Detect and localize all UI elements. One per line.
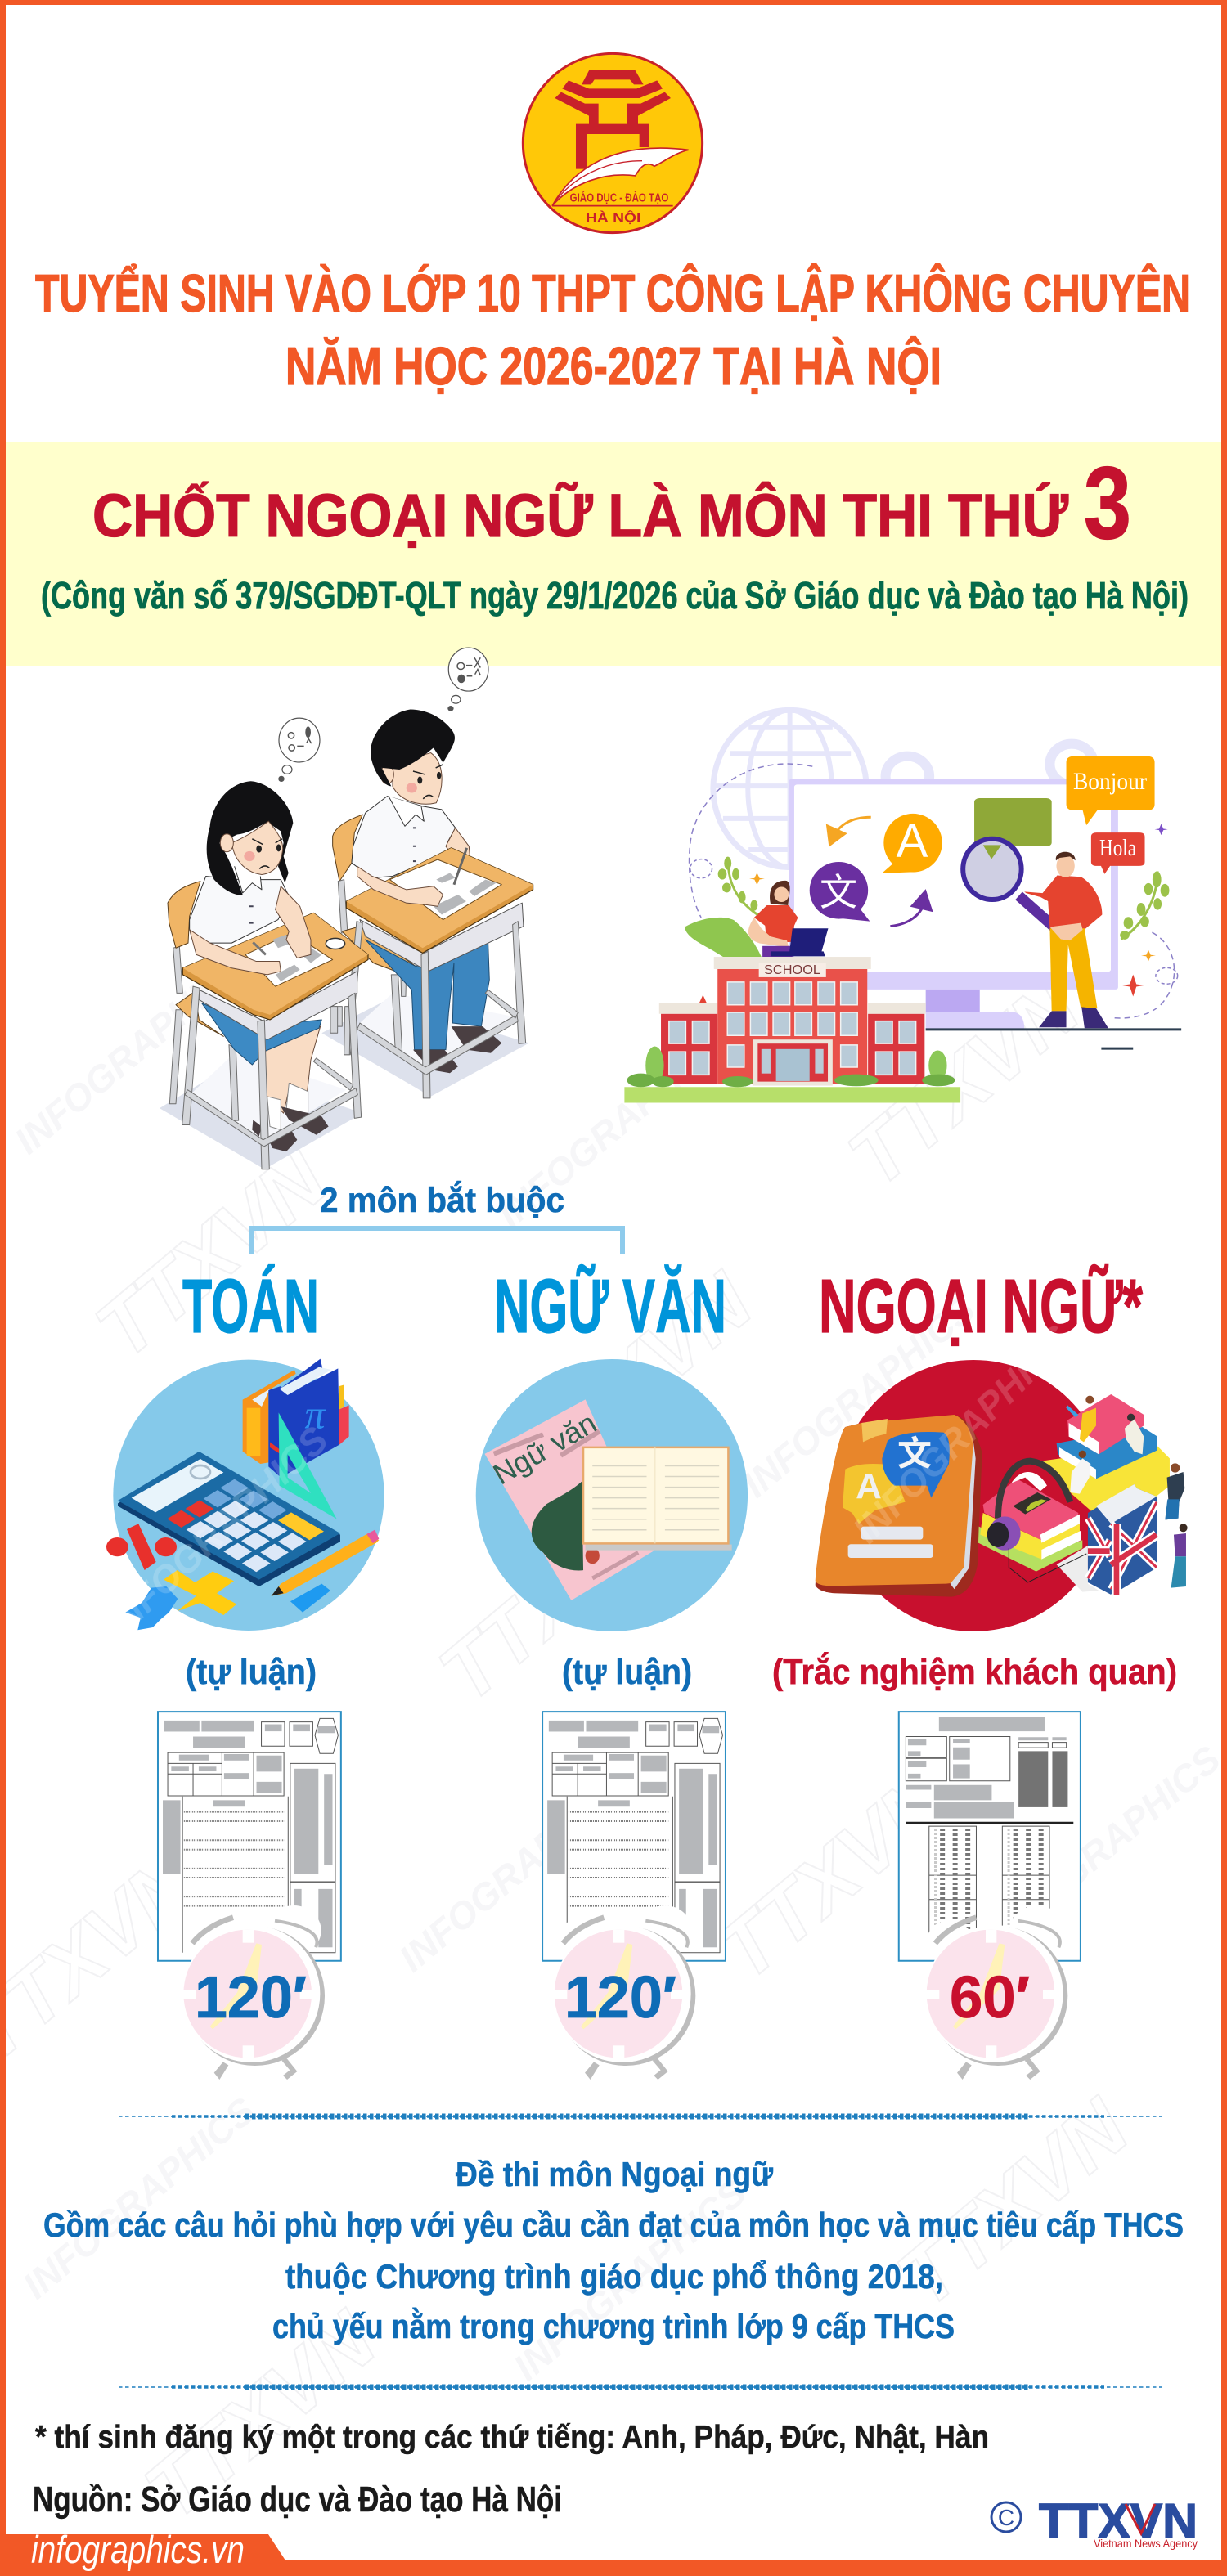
translucent watermark over circles: INFOGRAPHICS bbox=[845, 1317, 1079, 1551]
watermarks: INFOGRAPHICS bbox=[391, 1761, 640, 1980]
watermarks: TTXVN bbox=[79, 1133, 344, 1376]
footer tab bbox=[0, 2534, 1227, 2576]
logo: TTXVN: TTXVN bbox=[1039, 2494, 1198, 2548]
clock: 120 minutes Ngữ văn bbox=[554, 1905, 695, 2080]
bubble letter A: A bbox=[897, 815, 928, 868]
logo: TTXVN: C bbox=[998, 2505, 1014, 2530]
thought bubble: girl bbox=[278, 718, 320, 782]
watermarks: INFOGRAPHICS bbox=[15, 2089, 263, 2307]
watermarks: INFOGRAPHICS bbox=[980, 1737, 1227, 1955]
watermarks: TTXVN bbox=[423, 1476, 688, 1719]
watermarks: INFOGRAPHICS bbox=[735, 1287, 983, 1506]
translucent watermark over circles: INFOGRAPHICS bbox=[96, 1418, 336, 1646]
icon: literature circle with books bbox=[476, 1359, 748, 1631]
watermarks: INFOGRAPHICS bbox=[506, 2170, 754, 2389]
heading: Ngữ văn: NGỮ VĂN bbox=[494, 1263, 726, 1349]
headline: 3 bbox=[1084, 447, 1131, 560]
yellow headline band bbox=[0, 442, 1227, 666]
icon: foreign language circle with books bbox=[816, 1360, 1188, 1631]
bubble text: Bonjour: Bonjour bbox=[1073, 768, 1147, 795]
watermarks: TTXVN bbox=[505, 1255, 770, 1498]
clock: 60 minutes Ngoại ngữ: 60′ bbox=[950, 1965, 1030, 2031]
school sign: SCHOOL bbox=[764, 963, 820, 977]
watermarks: TTXVN bbox=[701, 1754, 966, 1997]
watermarks: INFOGRAPHICS bbox=[489, 1017, 738, 1236]
exam sheet: Toán bbox=[158, 1712, 341, 1961]
illustration: students taking exam bbox=[160, 648, 533, 1169]
clock: 120 minutes Ngữ văn: 120′ bbox=[564, 1965, 676, 2031]
exam sheet: Ngoại ngữ answer form bbox=[899, 1712, 1081, 1961]
watermarks: TTXVN bbox=[881, 2081, 1146, 2324]
bubble character: 文 bbox=[820, 863, 857, 917]
thought bubble: boy bbox=[447, 648, 488, 711]
exam format: essay: (tự luận) bbox=[562, 1652, 692, 1692]
watermarks: INFOGRAPHICS bbox=[7, 944, 255, 1162]
cover text: Ngữ văn: Ngữ văn bbox=[488, 1406, 602, 1491]
exam sheet: Ngữ văn bbox=[542, 1712, 726, 1961]
bracket: compulsory subjects bbox=[252, 1228, 622, 1254]
logo: Hanoi education department: GIÁO DỤC - ĐÀO TẠO bbox=[570, 191, 668, 205]
clock: 60 minutes Ngoại ngữ bbox=[926, 1905, 1067, 2080]
exam format: essay: (tự luận) bbox=[186, 1652, 317, 1692]
bubble character on language book: 文 bbox=[897, 1426, 932, 1476]
title bbox=[35, 263, 1190, 396]
exam format: multiple choice: (Trắc nghiệm khách quan) bbox=[772, 1651, 1177, 1692]
heading: Toán: TOÁN bbox=[182, 1263, 319, 1349]
source: Nguồn: Sở Giáo dục và Đào tạo Hà Nội bbox=[33, 2480, 562, 2520]
clock: 120 minutes Toán bbox=[182, 1905, 325, 2080]
footnote: languages: * thí sinh đăng ký một trong các thứ tiếng: Anh, Pháp, Đức, Nhật, Hàn bbox=[35, 2420, 989, 2455]
website: infographics.vn bbox=[31, 2528, 245, 2571]
bubble letter on language book: A bbox=[856, 1466, 882, 1506]
headline: CHỐT NGOẠI NGỮ LÀ MÔN THI THỨ bbox=[92, 482, 1069, 550]
translucent watermark over circles bbox=[96, 1317, 1079, 1646]
boy student bbox=[333, 710, 533, 1098]
watermarks bbox=[0, 944, 1227, 2537]
girl student bbox=[168, 781, 368, 1169]
icon: math circle with calculator and books: π bbox=[304, 1392, 326, 1438]
logo: Hanoi education department bbox=[523, 53, 703, 233]
text block: foreign language exam content: thuộc Chương trình giáo dục phổ thông 2018, bbox=[285, 2257, 943, 2296]
text block: foreign language exam content: Đề thi môn Ngoại ngữ bbox=[456, 2155, 774, 2193]
text block: foreign language exam content: chủ yếu nằm trong chương trình lớp 9 cấp THCS bbox=[272, 2306, 955, 2345]
logo: Hanoi education department: HÀ NỘI bbox=[586, 211, 640, 226]
logo: TTXVN: Vietnam News Agency bbox=[1094, 2537, 1198, 2550]
title: NĂM HỌC 2026-2027 TẠI HÀ NỘI bbox=[285, 336, 942, 396]
text block: foreign language exam content bbox=[43, 2155, 1184, 2345]
headline bbox=[92, 447, 1131, 560]
clock: 120 minutes Toán: 120′ bbox=[195, 1965, 307, 2031]
watermarks: TTXVN bbox=[832, 961, 1097, 1204]
illustration: language learning and school bbox=[624, 710, 1181, 1102]
language scene artwork bbox=[624, 710, 1181, 1102]
bubble text: Hola: Hola bbox=[1099, 836, 1136, 861]
watermarks: TTXVN bbox=[128, 2294, 393, 2537]
icon: math circle with calculator and books bbox=[106, 1359, 384, 1631]
label: 2 compulsory subjects: 2 môn bắt buộc bbox=[320, 1180, 564, 1220]
